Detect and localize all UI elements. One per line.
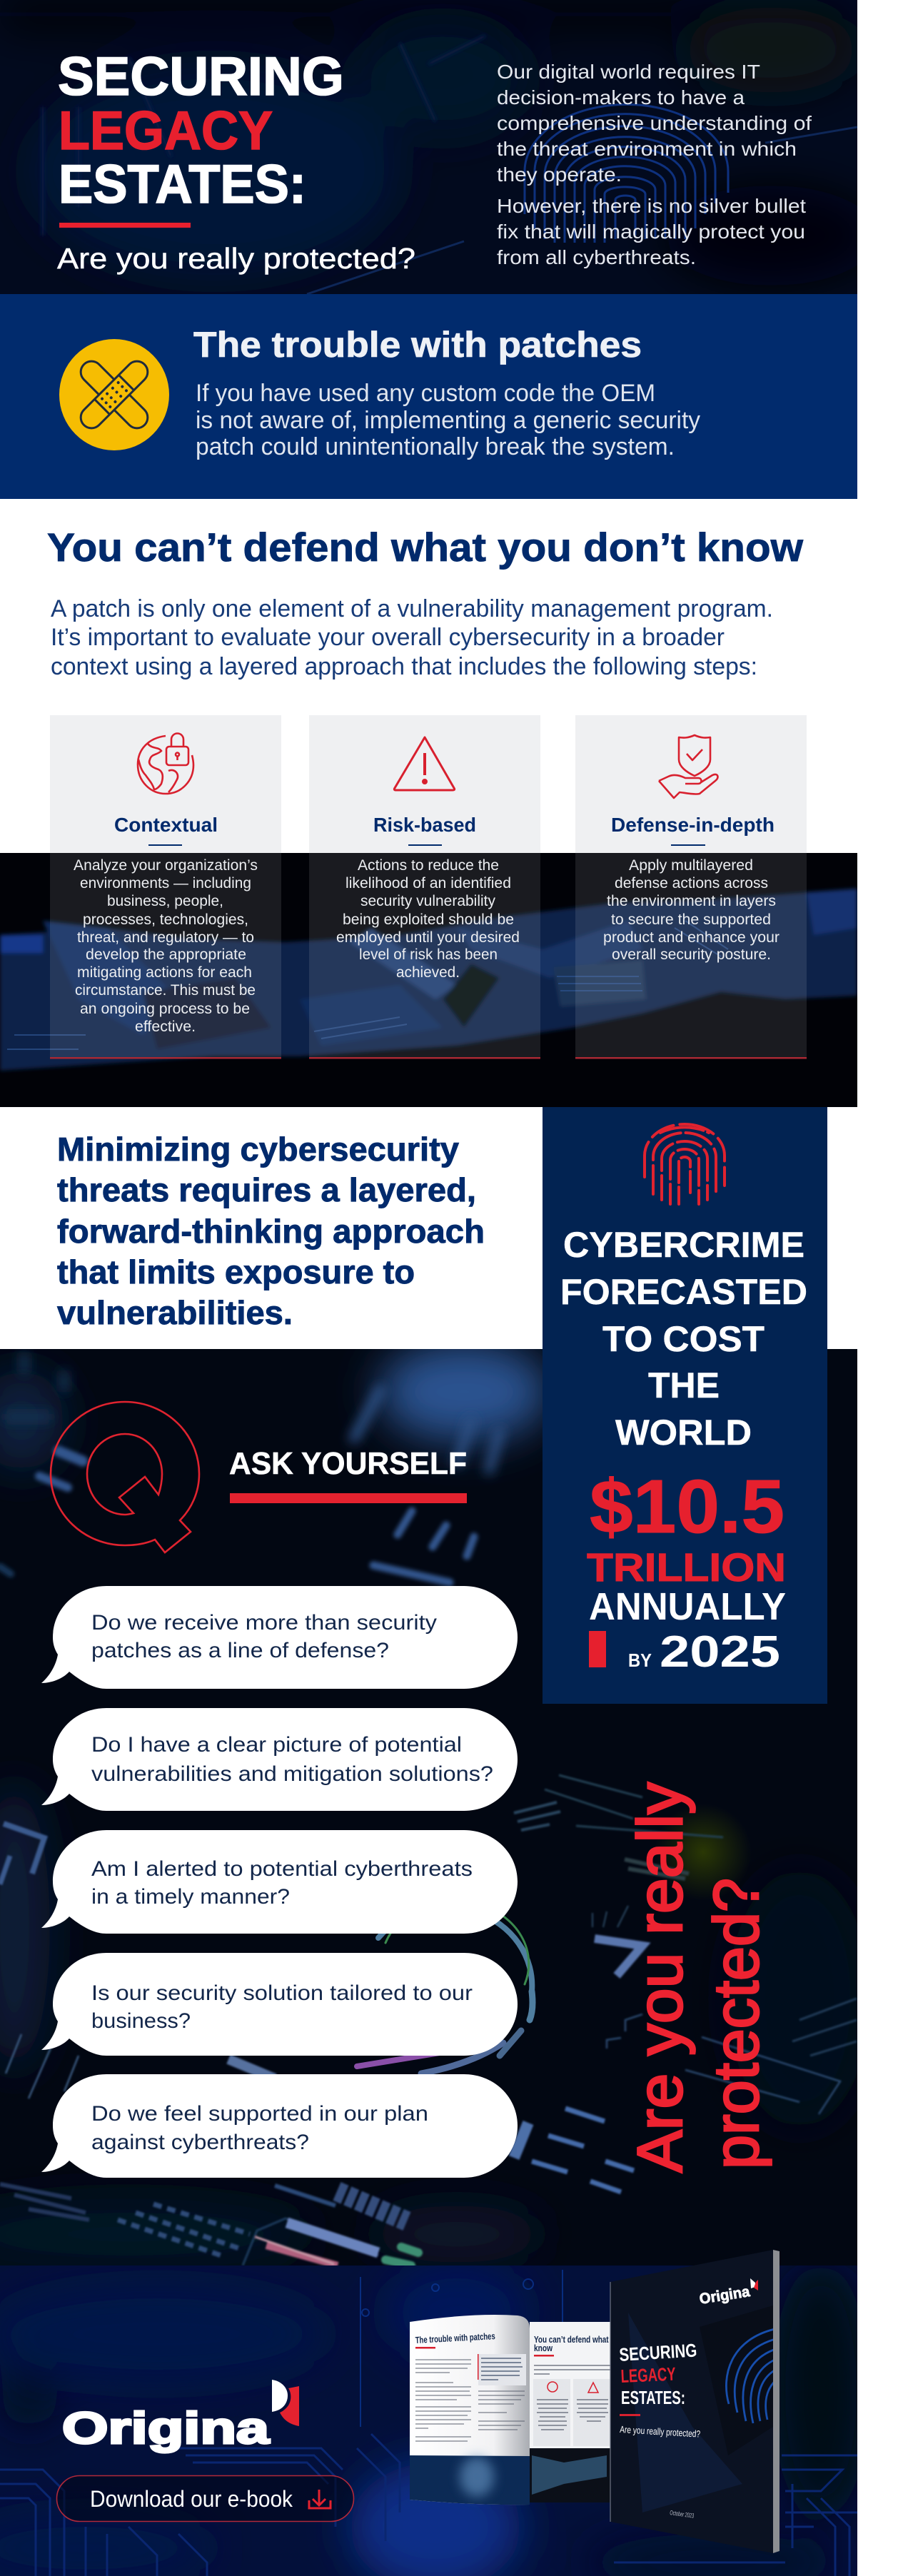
icon: shield in hand [659,735,717,798]
text block: likelihood of an identified [345,875,511,892]
speech bubble 3: Am I alerted to potential cyberthreats [91,1857,473,1881]
text block: hero intro: they operate. [497,163,622,186]
text block: circumstance. This must be [75,982,256,999]
hero fingerprint [525,104,728,243]
heading: The trouble with patches [193,325,642,365]
icon: download arrow [309,2490,331,2508]
text: cybercrime forecasted to cost the world [560,1225,807,1453]
text block: an ongoing process to be [80,1001,250,1017]
rotated text: are you really protected: Are you really [624,1782,695,2173]
fingerprint arcs behind bubbles [357,1901,533,2074]
panel: cybercrime forecast [543,1107,827,1704]
text block: being exploited should be [343,911,514,928]
text block: level of risk has been [359,946,498,963]
text block: processes, technologies, [83,911,248,928]
icon: globe with padlock [138,734,193,794]
text block: mitigating actions for each [77,964,252,981]
title: LEGACY [59,101,273,161]
heading: minimizing cybersecurity threats [57,1131,485,1331]
right page: know [534,2343,553,2353]
text block: hero intro: comprehensive understanding of [497,112,812,134]
text block: security vulnerability [360,893,495,909]
text block: achieved. [396,964,460,981]
text block: layered approach: A patch is only one element of a vulnerability management program. [51,595,773,622]
heading: minimizing cybersecurity threats: forward-thinking approach [57,1213,485,1250]
text block: effective. [135,1019,196,1035]
text block: hero intro: Our digital world requires IT [497,61,760,83]
panel: footer [0,2250,871,2576]
text block: Actions to reduce the [358,857,499,874]
text block: patch could unintentionally break the system. [196,433,675,460]
text block: Analyze your organization’s [74,857,258,874]
speech bubble 4: Is our security solution tailored to our [91,1981,473,2005]
text block: layered approach: It’s important to evaluate your overall cybersecurity in a broader [51,624,725,651]
stat: $10.5 trillion: TRILLION [587,1545,786,1590]
stat: annually by 2025: BY [628,1650,652,1671]
speech bubble 4: business? [91,2009,191,2033]
text block: the environment in layers [607,893,776,909]
text block: hero intro [497,61,812,268]
panel: the trouble with patches [0,294,857,499]
text block: hero intro: from all cyberthreats. [497,246,696,268]
text block: is not aware of, implementing a generic security [196,407,700,434]
rotated text: are you really protected: protected? [700,1878,772,2169]
book cover: SECURING [619,2339,697,2365]
right page: You can’t defend what you [534,2334,623,2345]
text block: to secure the supported [611,911,771,928]
text: cybercrime forecasted to cost the world: CYBERCRIME [563,1225,804,1265]
text block: Apply multilayered [629,857,753,874]
speech bubble 2 [41,1708,518,1811]
icon: fingerprint [645,1124,725,1204]
subtitle: Are you really protected? [57,242,415,275]
text block: hero intro: the threat environment in which [497,138,797,160]
speech bubble 2: Do I have a clear picture of potential [91,1733,462,1757]
panel: contextual card [50,715,281,1059]
speech bubble 1 [41,1586,518,1689]
text block: layered approach [51,595,773,680]
icon: warning triangle [394,737,455,790]
text block: hero intro: However, there is no silver bullet [497,195,806,217]
text block: employed until your desired [336,929,520,946]
divider: hero red bar [59,223,191,228]
text block: defense actions across [615,875,768,892]
logo: Origina: Origina [62,2404,270,2453]
text block [336,857,520,981]
book cover: ESTATES: [621,2387,685,2408]
heading: you can't defend: You can’t defend what you don’t know [47,525,803,570]
speech bubble 3 [41,1830,518,1934]
title: SECURING [58,46,344,107]
text block: product and enhance your [603,929,780,946]
button: download e-book: Download our e-book [90,2486,293,2512]
left page: The trouble with patches [415,2330,495,2345]
title [58,46,344,215]
book cover: October 2023 [670,2509,695,2520]
stat: annually by 2025: 2025 [660,1627,780,1677]
book mockup [410,2250,780,2553]
text block: business, people, [107,893,223,909]
stat: annually by 2025: ANNUALLY [589,1585,786,1628]
text block [603,857,780,963]
text block: hero intro: fix that will magically protect you [497,221,805,243]
left page [410,2315,530,2505]
icon: Q outline [51,1402,199,1552]
text block [196,380,700,460]
book cover: Origina [698,2283,751,2308]
text block: If you have used any custom code the OEM [196,380,655,407]
text: cybercrime forecasted to cost the world: FORECASTED [560,1272,807,1312]
stat: $10.5 trillion: $10.5 [590,1465,785,1549]
divider: red bar [230,1493,467,1503]
text block: hero intro: decision-makers to have a [497,86,745,108]
text: cybercrime forecasted to cost the world: THE [648,1365,720,1405]
text block: threat, and regulatory — to [77,929,254,946]
speech bubble 4 [41,1953,518,2056]
text: cybercrime forecasted to cost the world: WORLD [615,1413,752,1453]
book cover: Are you really protected? [620,2424,701,2440]
book cover: LEGACY [620,2363,676,2387]
text block [74,857,258,1035]
panel: ask yourself background [0,1342,871,2270]
panel: circuit image band [0,853,857,1107]
title: ESTATES: [59,154,306,215]
heading: ask yourself: ASK YOURSELF [229,1446,467,1481]
stat: annually by 2025 [589,1585,786,1677]
stat: $10.5 trillion [587,1465,786,1590]
speech bubble 5: against cyberthreats? [91,2131,309,2154]
speech bubble 3: in a timely manner? [91,1885,290,1909]
label: risk-based: Risk-based [373,814,476,836]
heading: minimizing cybersecurity threats: that limits exposure to [57,1253,415,1290]
heading: minimizing cybersecurity threats: threats requires a layered, [57,1171,476,1208]
rotated text: are you really protected [624,1782,772,2173]
speech bubble 1: patches as a line of defense? [91,1639,389,1662]
book cover [610,2250,780,2553]
label: defense-in-depth: Defense-in-depth [611,814,775,836]
right page [530,2322,610,2502]
text block: environments — including [80,875,251,892]
button: download e-book [57,2475,354,2521]
logo: Origina [62,2380,299,2453]
text block: develop the appropriate [86,946,246,963]
speech bubble 1: Do we receive more than security [91,1611,437,1635]
label: contextual: Contextual [114,814,218,836]
panel: hero [0,0,878,294]
speech bubble 5 [41,2074,518,2178]
heading: minimizing cybersecurity threats: Minimizing cybersecurity [57,1131,459,1168]
text: cybercrime forecasted to cost the world: TO COST [602,1319,765,1359]
text block: layered approach: context using a layered approach that includes the following steps: [51,653,757,680]
speech bubble 2: vulnerabilities and mitigation solutions? [91,1762,493,1786]
panel: risk-based card [309,715,540,1059]
icon: crossed bandages [59,339,169,450]
panel: defense-in-depth card [575,715,807,1059]
heading: minimizing cybersecurity threats: vulnerabilities. [57,1294,293,1331]
speech bubble 5: Do we feel supported in our plan [91,2102,428,2126]
text block: overall security posture. [612,946,771,963]
